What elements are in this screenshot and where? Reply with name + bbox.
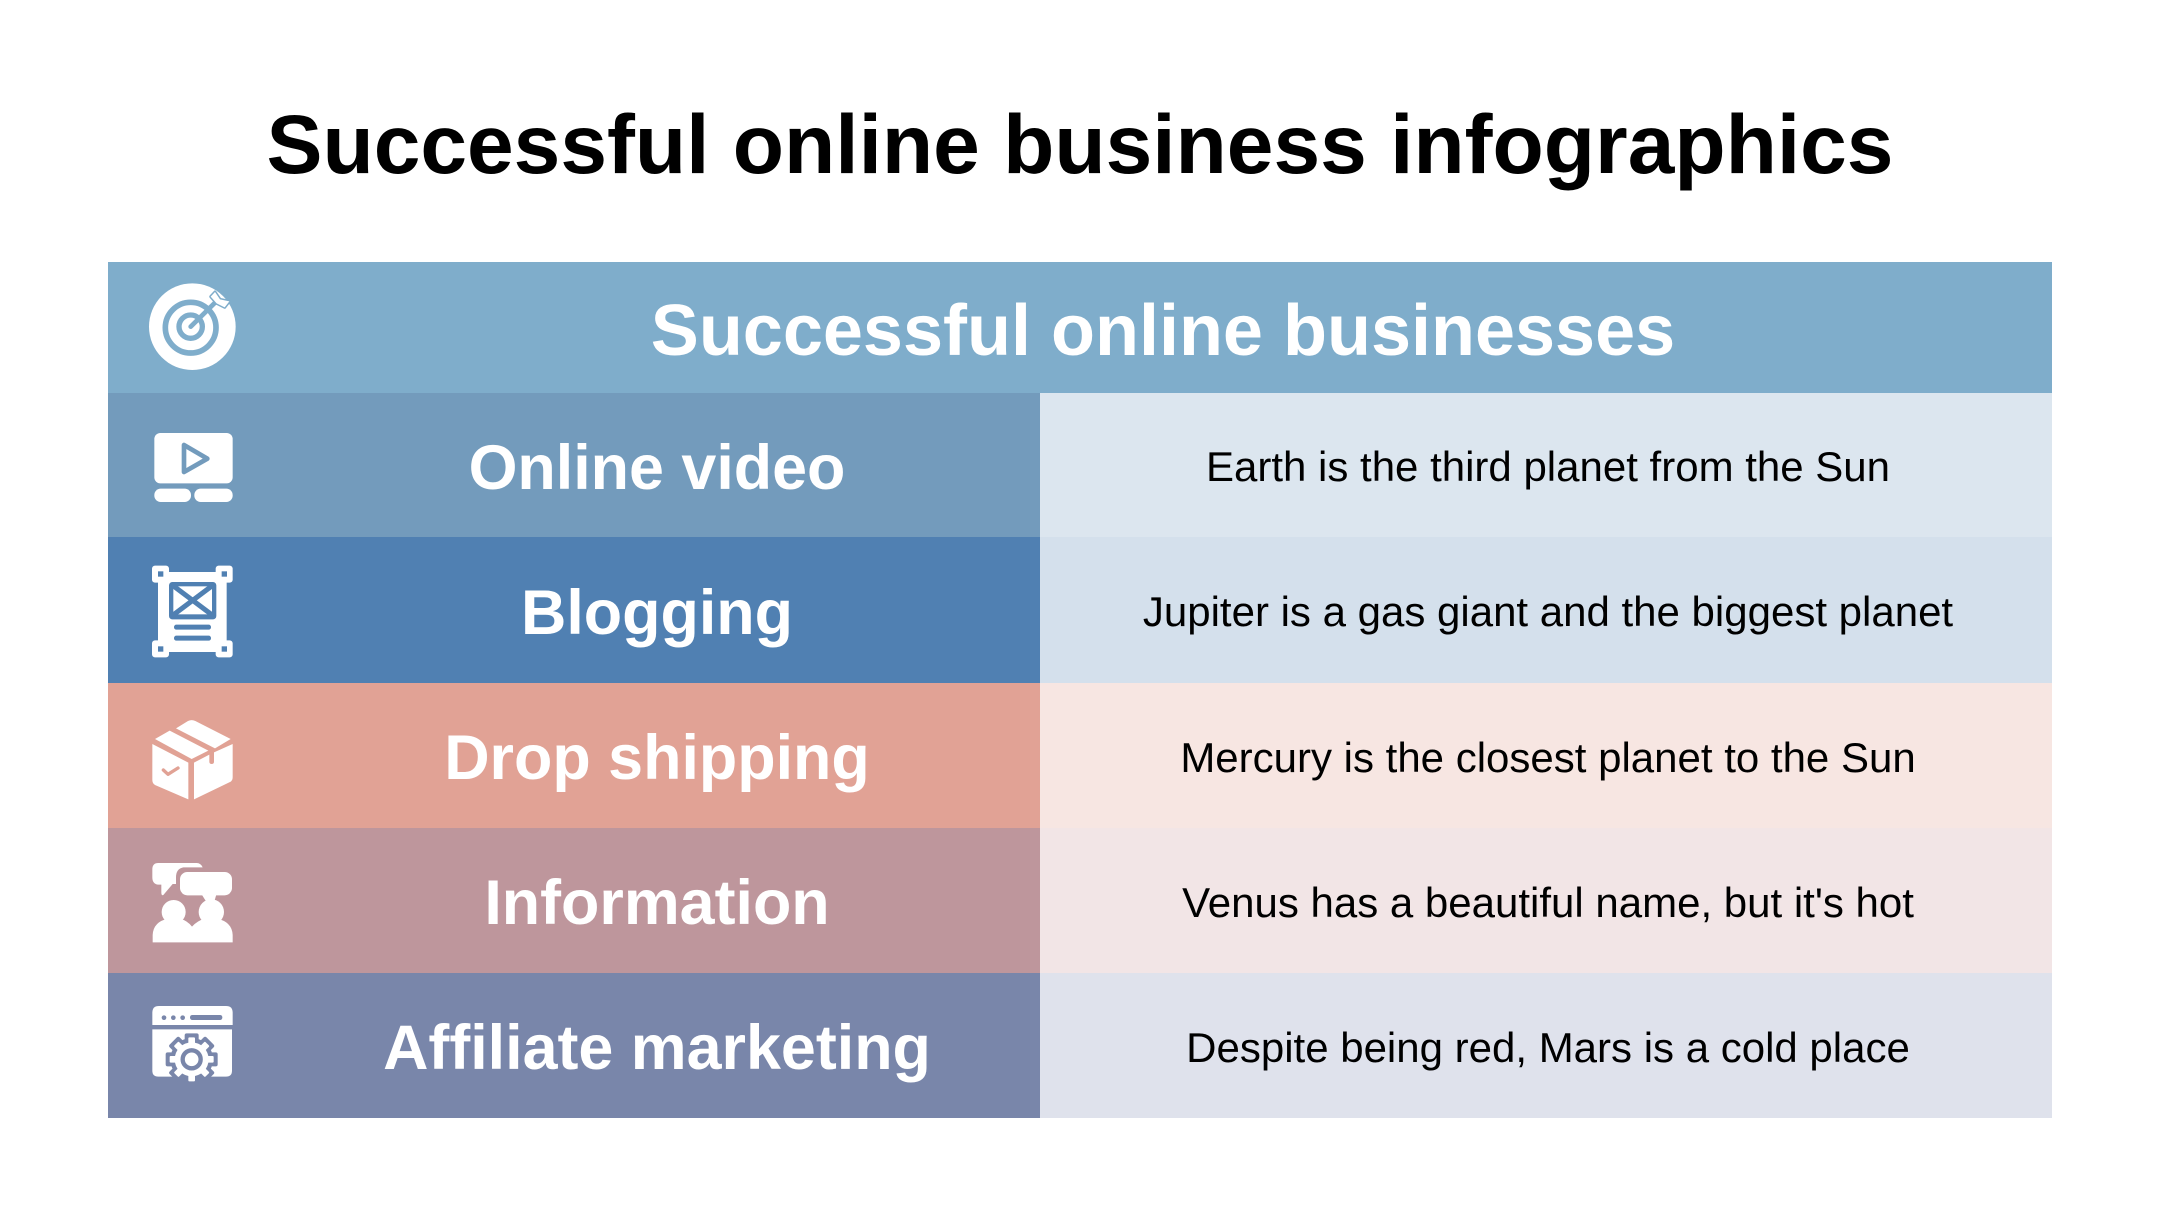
- header text: Successful online businesses: [651, 290, 1675, 370]
- title: Successful online business infographics: [267, 97, 1893, 191]
- icon: people talking: [152, 863, 233, 942]
- right cell: drop shipping: [1040, 683, 2052, 828]
- icon: browser settings gear: [152, 1006, 233, 1082]
- label: online video: Online video: [469, 432, 845, 502]
- right cell: blogging: [1040, 537, 2052, 683]
- right cell: affiliate marketing: [1040, 973, 2052, 1118]
- row: online video: [108, 393, 2052, 537]
- row: blogging: [108, 537, 2052, 683]
- description: information: Venus has a beautiful name, but it's hot: [1182, 878, 1914, 926]
- icon: video player: [154, 433, 233, 502]
- row: information: [108, 828, 2052, 973]
- left cell: information: [108, 828, 1040, 973]
- description: online video: Earth is the third planet from the Sun: [1206, 443, 1890, 490]
- description: drop shipping: Mercury is the closest planet to the Sun: [1180, 734, 1916, 780]
- description: blogging: Jupiter is a gas giant and the biggest planet: [1143, 588, 1953, 635]
- panel: table of successful online businesses: [108, 262, 2052, 1118]
- left cell: online video: [108, 393, 1040, 537]
- icon: article layout: [152, 566, 233, 658]
- right cell: information: [1040, 828, 2052, 973]
- label: blogging: Blogging: [521, 578, 793, 648]
- panel: table header: [108, 262, 2052, 393]
- label: affiliate marketing: Affiliate marketing: [383, 1013, 931, 1083]
- left cell: affiliate marketing: [108, 973, 1040, 1118]
- icon: parcel box: [152, 720, 233, 800]
- icon: target with arrow: [149, 283, 236, 370]
- description: affiliate marketing: Despite being red, Mars is a cold place: [1186, 1024, 1910, 1070]
- row: affiliate marketing: [108, 973, 2052, 1118]
- label: information: Information: [484, 868, 830, 938]
- left cell: drop shipping: [108, 683, 1040, 828]
- left cell: blogging: [108, 537, 1040, 683]
- row: drop shipping: [108, 683, 2052, 828]
- label: drop shipping: Drop shipping: [444, 723, 870, 793]
- right cell: online video: [1040, 393, 2052, 537]
